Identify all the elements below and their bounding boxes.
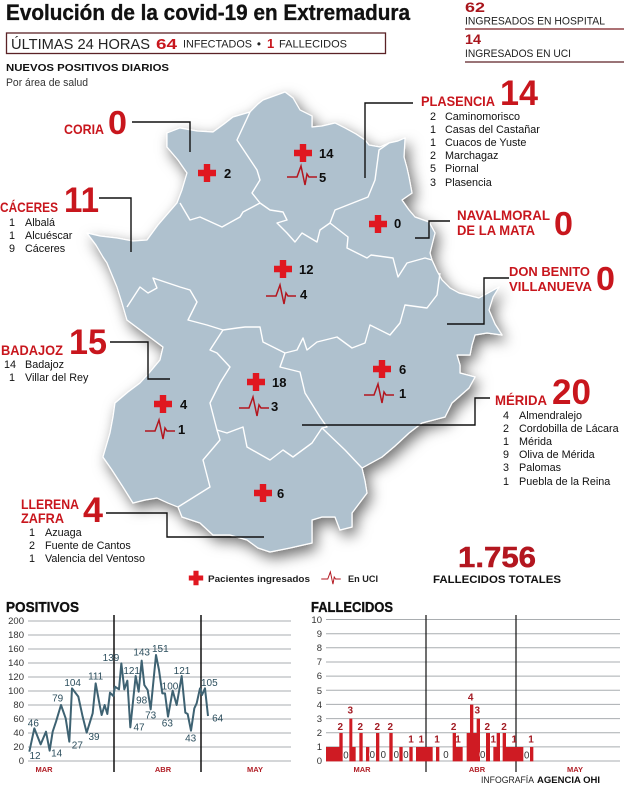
positivos line and values: 121	[174, 666, 191, 677]
callout: Plasencia: 1	[430, 124, 436, 136]
callout: Badajoz: 14	[4, 359, 16, 371]
positivos line and values: 46	[28, 719, 39, 730]
callout: Llerena Zafra	[21, 491, 264, 565]
Badajoz marker	[145, 395, 188, 439]
fallecidos bars and values: 0	[381, 750, 386, 761]
fallecidos axis and grid: 1	[317, 742, 322, 753]
legend: ICU	[321, 572, 378, 585]
fallecidos bars and values: 1	[419, 735, 425, 746]
callout: Navalmoral de la Mata: NAVALMORAL	[457, 207, 550, 223]
legend: ICU: En UCI	[348, 574, 378, 585]
fallecidos bars and values: 1	[528, 735, 534, 746]
fallecidos axis and grid: 4	[317, 700, 322, 711]
positivos axis and grid: 180	[8, 630, 24, 641]
subheading: NUEVOS POSITIVOS DIARIOS	[6, 62, 169, 74]
Plasencia marker: 5	[319, 170, 326, 185]
last 24 hours box	[6, 33, 386, 54]
callout: Badajoz: 15	[69, 323, 107, 362]
Don Benito marker: 6	[399, 362, 406, 377]
callout: Plasencia: 2	[430, 111, 436, 123]
fallecidos bars and values: 3	[475, 705, 481, 716]
last 24 hours box: •	[257, 38, 261, 50]
positivos axis and grid: 80	[13, 700, 24, 711]
Mérida marker	[239, 373, 286, 416]
callout: Don Benito Villanueva	[447, 260, 615, 324]
positivos axis and grid: 140	[8, 658, 24, 669]
fallecidos axis and grid: 10	[311, 615, 322, 626]
callout: Cáceres: Albalá	[25, 217, 55, 229]
callout: Plasencia: Marchagaz	[445, 150, 498, 162]
fallecidos bars and values: 2	[338, 722, 344, 733]
last 24 hours box: INFECTADOS	[183, 38, 252, 50]
hospital stats: INGRESADOS EN UCI	[465, 48, 571, 60]
positivos axis and grid: 200	[8, 616, 24, 627]
callout: Cáceres: Cáceres	[25, 243, 66, 255]
positivos line and values: 104	[64, 678, 81, 689]
callout: Navalmoral de la Mata: 0	[554, 205, 573, 242]
total deaths: 1.756	[458, 542, 536, 574]
callout: Mérida: 20	[552, 373, 591, 412]
positivos axis and grid: MAY	[247, 765, 263, 774]
callout: Mérida: Puebla de la Reina	[519, 476, 610, 488]
Navalmoral marker: 0	[394, 216, 401, 231]
fallecidos bars and values: 0	[443, 750, 449, 761]
positivos axis and grid: 40	[13, 728, 24, 739]
Plasencia marker	[287, 144, 334, 185]
subheading: Por área de salud	[6, 77, 88, 89]
positivos line and values	[28, 644, 224, 762]
fallecidos bars and values: 4	[468, 692, 474, 703]
callout: Cáceres	[0, 181, 131, 255]
legend	[189, 571, 378, 585]
hospital stats	[465, 0, 624, 62]
Don Benito marker: 1	[399, 386, 406, 401]
callout: Mérida: 1	[503, 436, 509, 448]
positivos line and values: 12	[29, 751, 41, 762]
fallecidos bars and values	[326, 692, 534, 762]
fallecidos bars and values: 0	[343, 751, 349, 762]
hospital stats: INGRESADOS EN HOSPITAL	[465, 16, 605, 28]
callout: Badajoz: BADAJOZ	[1, 342, 63, 358]
Mérida marker: 18	[272, 375, 286, 390]
callout: Mérida: Oliva de Mérida	[519, 449, 595, 461]
callout: Plasencia: PLASENCIA	[421, 93, 495, 109]
fallecidos axis and grid: 6	[317, 671, 322, 682]
callout: Cáceres: 1	[9, 230, 15, 242]
last 24 hours box: ÚLTIMAS 24 HORAS	[11, 36, 150, 53]
callout: Llerena Zafra: ZAFRA	[21, 510, 64, 526]
callout: Llerena Zafra: 4	[83, 491, 104, 530]
fallecidos bars and values: 0	[524, 751, 529, 762]
callout: Llerena Zafra: 1	[29, 553, 35, 565]
fallecidos bars and values: 0	[480, 750, 485, 761]
fallecidos bars and values: 1	[455, 735, 461, 746]
Mérida marker: 3	[271, 399, 278, 414]
Badajoz marker: 1	[178, 422, 185, 437]
callout: Llerena Zafra: 2	[29, 540, 35, 552]
fallecidos bars and values: 2	[358, 722, 364, 733]
callout: Coria: 0	[108, 104, 127, 141]
callout: Plasencia: 3	[430, 177, 436, 189]
fallecidos axis and grid: 8	[317, 643, 322, 654]
chart heading: fallecidos: FALLECIDOS	[311, 600, 393, 616]
callout: Mérida: Mérida	[519, 436, 552, 448]
positivos axis and grid: ABR	[155, 765, 172, 774]
Badajoz marker: 4	[180, 397, 188, 412]
legend: patients	[189, 571, 310, 585]
chart heading: positivos: POSITIVOS	[6, 600, 79, 616]
legend: patients: Pacientes ingresados	[208, 574, 310, 585]
fallecidos bars and values: 1	[491, 735, 497, 746]
callout: Cáceres: CÁCERES	[0, 199, 58, 215]
callout: Coria: CORIA	[64, 121, 104, 137]
callout: Coria	[64, 104, 190, 152]
callout: Plasencia: 2	[430, 150, 436, 162]
positivos line and values: 63	[162, 718, 173, 729]
positivos axis and grid: 120	[8, 672, 24, 683]
positivos line and values: 151	[152, 644, 169, 655]
last 24 hours box: 1	[267, 36, 274, 51]
callout: Cáceres: 11	[64, 181, 99, 220]
Coria marker	[198, 164, 231, 182]
fallecidos bars and values: 0	[394, 750, 399, 761]
callout: Badajoz: Villar del Rey	[25, 372, 89, 384]
callout: Cáceres: Alcuéscar	[25, 230, 73, 242]
callout: Plasencia: Cuacos de Yuste	[445, 137, 526, 149]
hospital stats: 14	[465, 31, 481, 47]
district borders	[127, 112, 440, 507]
callout: Mérida: 3	[503, 462, 509, 474]
positivos axis and grid: MAR	[35, 765, 53, 774]
callout: Llerena Zafra: Azuaga	[45, 527, 82, 539]
positivos line and values: 14	[51, 749, 63, 760]
Navalmoral marker	[369, 215, 401, 233]
subheading	[6, 62, 169, 89]
callout: Mérida: 4	[503, 410, 509, 422]
callout: Llerena Zafra: Fuente de Cantos	[45, 540, 131, 552]
callout: Don Benito Villanueva: 0	[596, 260, 615, 297]
positivos line and values: 100	[162, 681, 179, 692]
last 24 hours box: 64	[156, 36, 178, 53]
fallecidos axis and grid: 3	[317, 714, 322, 725]
positivos line and values: 43	[185, 734, 197, 745]
callout: Badajoz: Badajoz	[25, 359, 64, 371]
callout: Navalmoral de la Mata	[415, 205, 573, 242]
callout: Badajoz	[1, 323, 170, 384]
fallecidos axis and grid: MAY	[567, 765, 583, 774]
callout: Mérida: 9	[503, 449, 509, 461]
positivos line and values: 98	[136, 695, 148, 706]
callout: Mérida: Cordobilla de Lácara	[519, 423, 619, 435]
fallecidos bars and values: 2	[485, 722, 491, 733]
fallecidos axis and grid: 0	[317, 756, 322, 767]
callout: Cáceres: 1	[9, 217, 15, 229]
Cáceres marker: 4	[300, 287, 308, 302]
fallecidos axis and grid: 5	[317, 686, 322, 697]
last 24 hours box: FALLECIDOS	[279, 38, 347, 50]
positivos line and values: 121	[123, 666, 140, 677]
positivos line and values: 64	[212, 714, 224, 725]
positivos line and values: 47	[133, 723, 145, 734]
callout: Mérida: Almendralejo	[519, 410, 582, 422]
callout: Plasencia: Casas del Castañar	[445, 124, 540, 136]
fallecidos bars and values: 2	[451, 722, 457, 733]
fallecidos axis and grid	[311, 615, 620, 774]
callout: Plasencia: 14	[500, 74, 539, 113]
positivos axis and grid	[8, 615, 291, 774]
positivos axis and grid: 20	[13, 742, 24, 753]
callout: Plasencia: Plasencia	[445, 177, 492, 189]
fallecidos bars and values: 2	[388, 722, 394, 733]
callout: Plasencia	[365, 74, 540, 189]
fallecidos bars and values: 0	[370, 750, 375, 761]
fallecidos bars and values: 0	[403, 750, 409, 761]
fallecidos bars and values: 2	[375, 722, 381, 733]
chart: positivos	[6, 600, 291, 774]
fallecidos bars and values: 3	[348, 705, 354, 716]
fallecidos axis and grid: ABR	[469, 765, 486, 774]
positivos axis and grid: 100	[8, 686, 24, 697]
positivos line and values: 139	[103, 653, 120, 664]
positivos axis and grid: 0	[19, 756, 24, 767]
callout: Llerena Zafra: 1	[29, 527, 35, 539]
Plasencia marker: 14	[319, 146, 334, 161]
callout: Navalmoral de la Mata: DE LA MATA	[457, 222, 535, 238]
credit: AGENCIA OHI	[537, 775, 600, 786]
credit: INFOGRAFÍA	[481, 775, 535, 786]
positivos axis and grid: 160	[8, 644, 24, 655]
fallecidos axis and grid: 2	[317, 728, 322, 739]
Llerena marker	[254, 484, 284, 502]
callout: Llerena Zafra: Valencia del Ventoso	[45, 553, 145, 565]
fallecidos bars and values: 1	[512, 735, 518, 746]
callout: Mérida: 1	[503, 476, 509, 488]
callout: Cáceres: 9	[9, 243, 15, 255]
positivos line and values: 79	[52, 694, 64, 705]
chart: fallecidos	[311, 600, 620, 774]
callout: Don Benito Villanueva: DON BENITO	[509, 264, 590, 279]
fallecidos axis and grid: 7	[317, 657, 322, 668]
credit	[481, 775, 600, 786]
positivos line and values: 73	[145, 710, 157, 721]
fallecidos bars and values: 1	[434, 735, 440, 746]
fallecidos axis and grid: MAR	[353, 765, 371, 774]
map icons and figures	[145, 144, 406, 502]
fallecidos bars and values: 1	[408, 735, 414, 746]
callout: Mérida	[302, 373, 619, 488]
callout: Plasencia: 1	[430, 137, 436, 149]
Cáceres marker: 12	[299, 262, 313, 277]
fallecidos bars and values: 2	[501, 722, 507, 733]
callout: Mérida: Palomas	[519, 462, 562, 474]
callout: Plasencia: Piornal	[445, 163, 479, 175]
positivos line and values: 105	[201, 678, 218, 689]
title: Evolución de la covid-19 en Extremadura	[6, 0, 411, 25]
callout: Don Benito Villanueva: VILLANUEVA	[509, 279, 593, 294]
total deaths: FALLECIDOS TOTALES	[433, 574, 561, 586]
callout: Llerena Zafra: LLERENA	[21, 496, 79, 512]
positivos line and values: 39	[88, 732, 100, 743]
positivos line and values: 111	[88, 671, 104, 682]
Don Benito marker	[364, 360, 406, 403]
callout: Plasencia: 5	[430, 163, 436, 175]
callout: Mérida: 2	[503, 423, 509, 435]
fallecidos axis and grid: 9	[317, 629, 322, 640]
positivos axis and grid: 60	[13, 714, 24, 725]
Llerena marker: 6	[277, 486, 284, 501]
callout: Badajoz: 1	[9, 372, 15, 384]
callout: Plasencia: Caminomorisco	[445, 111, 520, 123]
callout: Mérida: MÉRIDA	[495, 392, 547, 408]
total deaths	[433, 542, 561, 586]
positivos line and values: 27	[72, 741, 83, 752]
positivos line and values: 143	[133, 648, 150, 659]
map of Extremadura	[87, 92, 502, 552]
Coria marker: 2	[224, 166, 231, 181]
Cáceres marker	[266, 260, 313, 304]
